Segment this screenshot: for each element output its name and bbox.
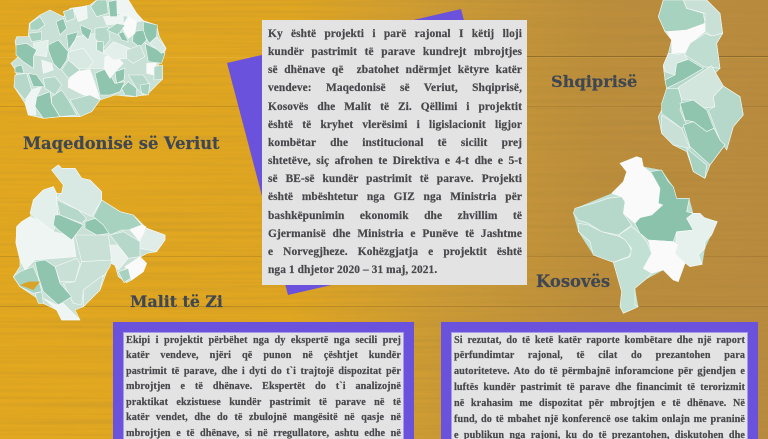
text: project description: së dhënave që zbatohet ndërmjet këtyre katër [268,64,522,76]
text: project description: Ky është projekti i parë rajonal I këtij lloji [268,28,522,40]
text: project description [268,28,522,276]
text: results: luftës kundër pastrimit të parave dhe financimit të terorizmit [454,382,745,393]
text: results: fund, do të mbahet një konferencë ose takim onlajn me praninë [454,414,745,425]
text: project description: së BE-së kundër pastrimit të parave. Projekti [268,173,522,185]
text: project team: mbrojtjen e të dhënave. Ekspertët do t`i analizojnë [126,381,401,392]
text: results: autoriteteve. Ato do të përmbajnë inforamcione për gjendjen e [454,366,745,377]
text: project description: është mbështetur nga GIZ nga Ministria për [268,191,522,203]
text: project description: bashkëpunimin ekonomik dhe zhvillim të [268,210,522,222]
heading: Kosovës: Kosovës [536,272,610,291]
heading: Maqedonisë së Veriut: Maqedonisë së Veriut [23,134,220,153]
text: project description: kundër pastrimit të parave kundrejt mbrojtjes [268,46,522,58]
map: North Macedonia [11,0,166,118]
text: project description: vendeve: Maqedonisë së Veriut, Shqiprisë, [268,82,522,94]
text: project description: Gjermanisë dhe Ministria e Punëve të Jashtme [268,228,522,240]
text: project description: shtetëve, siç afrohen te Direktiva e 4-t dhe e 5-t [268,155,522,167]
text: project description: e Norvegjheze. Kohëzgjatja e projektit është [268,246,522,258]
text: results [454,334,745,439]
text: project team: pastrimit të parave, dhe i dyti do t`i trajtojë dispozitat për [126,366,401,376]
panel: project team [113,322,414,439]
map: Kosovo [573,157,717,313]
text: project team: praktikat ekzistuese kundër pastrimit të parave në të [126,396,401,408]
text: project description: është të kryhet vlerësimi i ligislacionit ligjor [268,119,522,131]
inner panel: results [452,333,747,439]
text: project team: Ekipi i projektit përbëhet nga dy ekspertë nga secili prej [126,334,401,346]
inner panel: project team [124,333,403,439]
heading: Malit të Zi: Malit të Zi [130,292,223,311]
text: project team: katër vendeve, njëri që punon në çështjet kundër [126,350,401,361]
text: results: përfundimtar rajonal, të cilat do prezantohen para [454,350,745,361]
map: Albania [658,0,743,178]
text: results: në krahasim me dispozitat për mbrojtjen e të dhënave. Në [454,398,745,409]
text: project description: nga 1 dhjetor 2020 – 31 maj, 2021. [268,264,437,276]
panel: results [441,322,758,439]
text: project team: katër vendet, dhe do të zbulojnë mangësitë në qasje në [126,412,401,423]
text: project team: mbrojtjen e të dhënave, si në rregullatore, ashtu edhe në [126,428,401,438]
panel: project description [262,20,527,285]
text: project description: kombëtar dhe institucional të sicilit prej [268,137,522,149]
map: Montenegro [13,165,165,320]
text: results: Si rezutat, do të ketë katër raporte kombëtare dhe një raport [454,334,745,346]
text: project team [126,334,401,439]
text: project description: Kosovës dhe Malit të Zi. Qëllimi i projektit [268,101,522,113]
heading: Shqiprisë: Shqiprisë [551,72,637,91]
